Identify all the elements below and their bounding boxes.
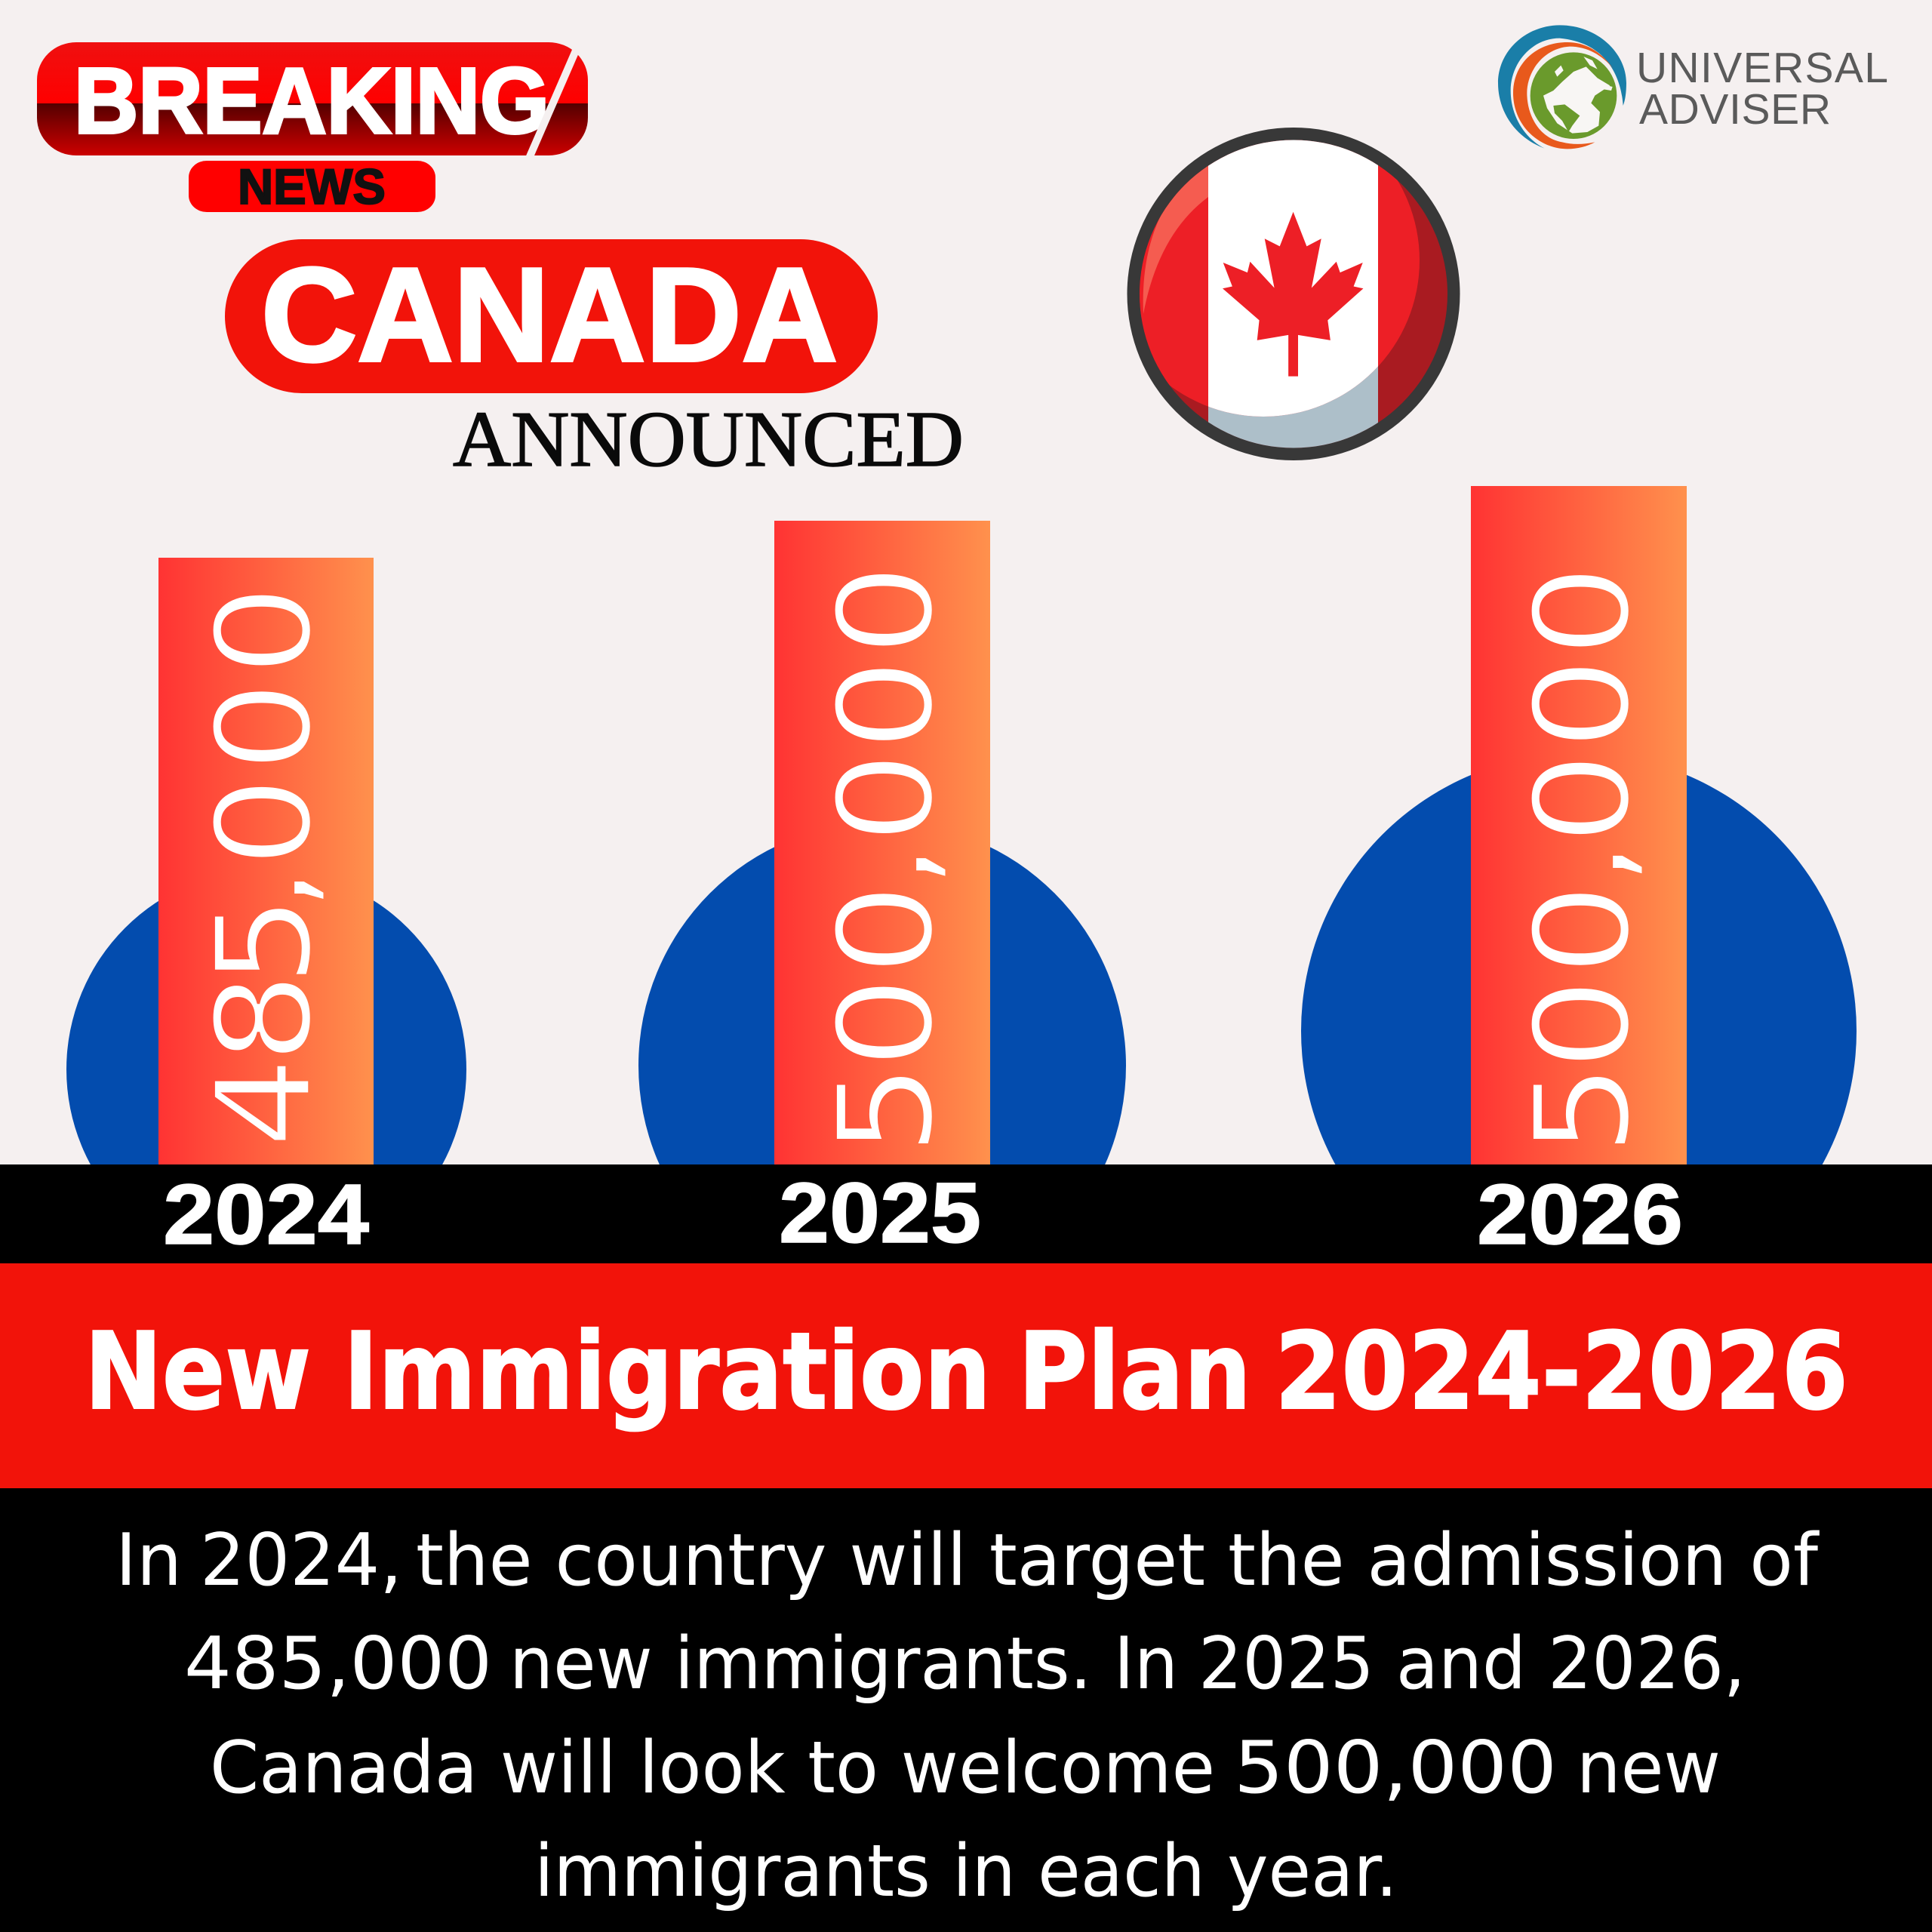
description panel: the country will target the admission of bbox=[416, 1519, 1820, 1602]
badge: news bbox=[189, 158, 435, 214]
chart: immigration targets by year bbox=[66, 486, 1857, 1309]
title band: Immigration bbox=[343, 1310, 991, 1434]
badge: news: NEWS bbox=[238, 158, 386, 214]
bar group: 2024 bbox=[66, 558, 466, 1269]
description panel: 500,000 bbox=[1234, 1727, 1557, 1810]
description panel: 485,000 bbox=[184, 1623, 492, 1706]
description panel: Canada will look to welcome bbox=[210, 1727, 1215, 1810]
badge: canada: CANADA bbox=[261, 240, 838, 389]
icon: maple leaf bbox=[1223, 212, 1363, 377]
description panel: new immigrants. In bbox=[509, 1623, 1178, 1706]
title band: Plan bbox=[1018, 1310, 1251, 1434]
description panel bbox=[0, 1488, 1932, 1932]
description panel: 2025 and 2026, bbox=[1198, 1623, 1746, 1706]
text: universal: UNIVERSAL bbox=[1636, 44, 1888, 92]
label: 2025: 2025 bbox=[779, 1165, 981, 1260]
bar group: 2026: 500,000 bbox=[1506, 564, 1659, 1156]
badge: breaking: BREAKING bbox=[74, 50, 549, 153]
text: adviser: ADVISER bbox=[1639, 85, 1831, 134]
bar group: 2024: 485,000 bbox=[188, 584, 341, 1149]
bar group: 2025 bbox=[638, 521, 1126, 1309]
icon: globe bbox=[1498, 25, 1626, 149]
icon: canada flag button bbox=[1128, 128, 1460, 460]
description panel: In bbox=[115, 1519, 182, 1602]
description panel: new bbox=[1577, 1727, 1721, 1810]
text: announced: ANNOUNCED bbox=[453, 395, 964, 483]
label: 2026: 2026 bbox=[1477, 1167, 1683, 1262]
bar group: 2025: 500,000 bbox=[810, 563, 962, 1156]
title band: New bbox=[85, 1310, 311, 1434]
description panel: 2024, bbox=[200, 1519, 402, 1602]
bar group: 2026 bbox=[1301, 486, 1857, 1309]
description panel: immigrants in each year. bbox=[534, 1830, 1398, 1913]
title band: 2024-2026 bbox=[1275, 1310, 1848, 1434]
label: 2024: 2024 bbox=[163, 1167, 369, 1262]
logo: universal adviser bbox=[1498, 25, 1888, 149]
year band bbox=[0, 1164, 1932, 1263]
title band bbox=[0, 1263, 1932, 1488]
